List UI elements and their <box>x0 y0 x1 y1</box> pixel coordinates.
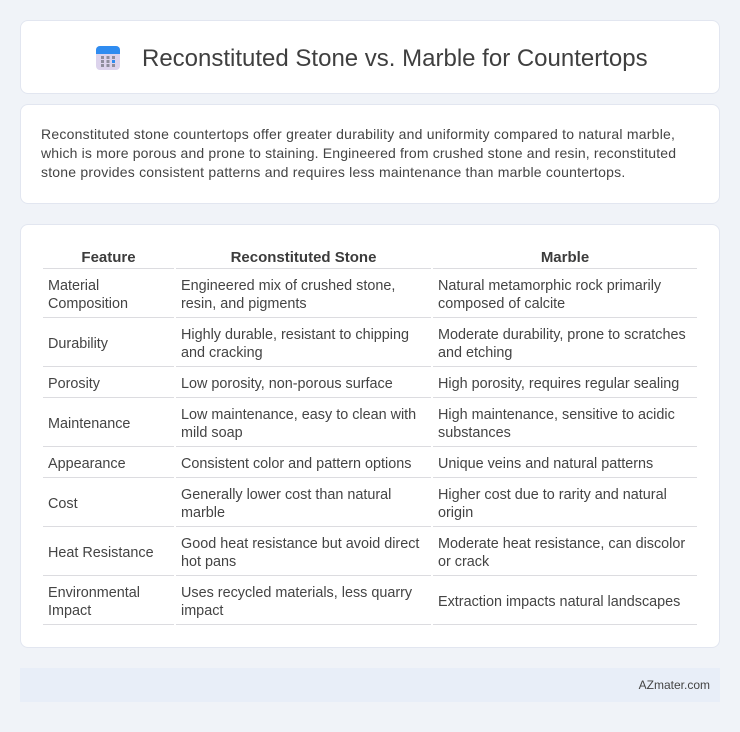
row: Maintenance <box>48 407 675 441</box>
row: Material Composition: Composition <box>48 296 128 312</box>
footer source text: AZmater.com <box>639 678 710 692</box>
row: Cost: Higher cost due to rarity and natural <box>438 487 667 503</box>
row: Environmental Impact: Environmental <box>48 585 140 601</box>
row: Environmental Impact: Impact <box>48 603 91 619</box>
row: Durability: Highly durable, resistant to chipping <box>181 327 409 343</box>
row: Porosity: High porosity, requires regular sealing <box>438 376 679 392</box>
row: Environmental Impact: Uses recycled materials, less quarry <box>181 585 412 601</box>
row: Durability <box>48 327 686 361</box>
row: Maintenance: substances <box>438 425 511 441</box>
icon: calendar <box>96 46 120 70</box>
row: Cost: origin <box>438 505 473 521</box>
row: Maintenance: Low maintenance, easy to clean with <box>181 407 416 423</box>
row: Maintenance: mild soap <box>181 425 243 441</box>
row: Material Composition: composed of calcite <box>438 296 565 312</box>
title card <box>20 20 720 94</box>
row: Material Composition: Material <box>48 278 99 294</box>
intro text panel: stone provides consistent patterns and requires less maintenance than marble countertops. <box>41 164 625 180</box>
row: Porosity: Porosity <box>48 376 100 392</box>
row: Material Composition <box>48 278 661 312</box>
row: Material Composition: Engineered mix of crushed stone, <box>181 278 395 294</box>
row: Durability: Durability <box>48 336 108 352</box>
row: Maintenance: High maintenance, sensitive to acidic <box>438 407 675 423</box>
row: Material Composition: Natural metamorphic rock primarily <box>438 278 661 294</box>
row: Heat Resistance: hot pans <box>181 554 236 570</box>
row: Heat Resistance: or crack <box>438 554 489 570</box>
row: Durability: and cracking <box>181 345 263 361</box>
row: Cost: Generally lower cost than natural <box>181 487 391 503</box>
heading: Reconstituted Stone vs. Marble for Countertops <box>142 45 648 72</box>
row: Appearance: Unique veins and natural patterns <box>438 456 653 472</box>
table header: Feature: Feature <box>81 249 136 266</box>
table header: Marble: Marble <box>541 249 589 266</box>
row: Porosity <box>48 376 679 392</box>
intro text panel <box>20 104 720 204</box>
row: Heat Resistance: Good heat resistance but avoid direct <box>181 536 419 552</box>
row: Porosity: Low porosity, non-porous surface <box>181 376 393 392</box>
row: Heat Resistance: Heat Resistance <box>48 545 154 561</box>
row: Durability: and etching <box>438 345 512 361</box>
table header: Reconstituted Stone: Reconstituted Stone <box>231 249 376 266</box>
row: Cost <box>48 487 667 521</box>
row: Environmental Impact: Extraction impacts natural landscapes <box>438 594 680 610</box>
row: Cost: marble <box>181 505 225 521</box>
row: Appearance: Consistent color and pattern options <box>181 456 411 472</box>
footer bar <box>20 668 720 702</box>
row: Appearance: Appearance <box>48 456 126 472</box>
row: Material Composition: resin, and pigments <box>181 296 307 312</box>
row: Environmental Impact: impact <box>181 603 223 619</box>
row: Cost: Cost <box>48 496 78 512</box>
row: Heat Resistance: Moderate heat resistance, can discolor <box>438 536 685 552</box>
row: Durability: Moderate durability, prone to scratches <box>438 327 686 343</box>
intro text panel: which is more porous and prone to staining. Engineered from crushed stone and resin, reconstituted <box>41 145 676 161</box>
row: Appearance <box>48 456 653 472</box>
row: Heat Resistance <box>48 536 685 570</box>
intro text panel: Reconstituted stone countertops offer greater durability and uniformity compared to natural marble, <box>41 126 675 142</box>
row: Environmental Impact <box>48 585 680 619</box>
row: Maintenance: Maintenance <box>48 416 130 432</box>
